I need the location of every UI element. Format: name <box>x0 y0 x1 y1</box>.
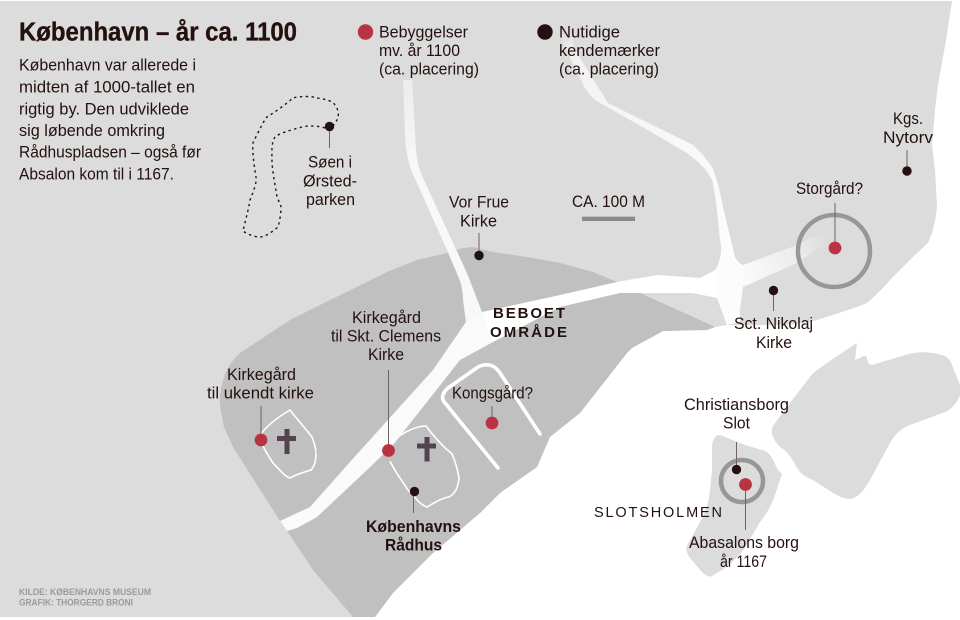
marker: Absalons borg: Abasalons borg <box>689 534 799 552</box>
legend: present-day landmarks: kendemærker <box>559 42 661 60</box>
marker: Storgård <box>796 180 870 287</box>
marker: Absalons borg <box>689 478 799 571</box>
title: København – år ca. 1100 <box>19 18 297 46</box>
land: inhabited area <box>220 247 715 617</box>
credits <box>19 587 151 608</box>
marker: unknown church cemetery: til ukendt kirke <box>207 384 314 402</box>
scale bar <box>572 192 645 221</box>
legend: settlements: Bebyggelser <box>379 24 469 42</box>
marker: Christiansborg Slot: Slot <box>723 414 750 432</box>
road: north-east <box>560 30 743 325</box>
marker: Skt. Clemens cemetery: til Skt. Clemens <box>331 328 441 346</box>
road: south-west <box>280 312 493 531</box>
text block: intro <box>19 56 201 183</box>
text block: intro: sig løbende omkring <box>19 121 165 140</box>
marker: unknown church cemetery: Kirkegård <box>227 366 296 384</box>
scale bar: CA. 100 M <box>572 192 645 211</box>
marker: Sct. Nikolaj Kirke: Kirke <box>756 334 792 352</box>
island: Amager <box>772 343 960 499</box>
marker: Søen i Ørstedparken: parken <box>306 191 355 209</box>
marker: Skt. Clemens cemetery: Kirke <box>368 346 404 364</box>
text block: intro: rigtig by. Den udviklede <box>19 99 189 118</box>
credits: GRAFIK: THORGERD BRONI <box>19 598 133 608</box>
marker: Københavns Rådhus: Rådhus <box>385 536 442 554</box>
label: Beboet område: OMRÅDE <box>490 324 567 341</box>
marker: Kgs. Nytorv <box>883 110 934 176</box>
marker: Søen i Ørstedparken: Søen i <box>308 154 352 172</box>
road: east <box>466 272 717 342</box>
marker: Søen i Ørstedparken: Ørsted- <box>303 172 357 190</box>
marker: Sct. Nikolaj Kirke: Sct. Nikolaj <box>734 315 813 333</box>
text block: intro: Rådhuspladsen – også før <box>19 143 201 162</box>
marker: Københavns Rådhus: Københavns <box>366 518 461 536</box>
marker: Storgård: Storgård? <box>796 180 863 198</box>
marker: Skt. Clemens cemetery: Kirkegård <box>352 309 421 327</box>
marker: Vor Frue Kirke: Vor Frue <box>449 194 509 212</box>
marker: Vor Frue Kirke: Kirke <box>460 212 497 230</box>
text block: intro: Absalon kom til i 1167. <box>19 164 174 183</box>
marker: Kgs. Nytorv: Nytorv <box>883 129 934 147</box>
credits: KILDE: KØBENHAVNS MUSEUM <box>19 587 151 597</box>
label: Beboet område <box>490 305 567 341</box>
marker: Søen i Ørstedparken <box>243 96 357 237</box>
island: Slotsholmen <box>686 435 782 576</box>
marker: Christiansborg Slot: Christiansborg <box>684 396 789 414</box>
marker: Vor Frue Kirke <box>449 194 509 260</box>
marker: Kgs. Nytorv: Kgs. <box>893 110 923 128</box>
marker: Kongsgård: Kongsgård? <box>452 384 533 402</box>
text block: intro: midten af 1000-tallet en <box>19 78 195 96</box>
legend: present-day landmarks <box>537 24 661 78</box>
marker: Københavns Rådhus <box>366 487 461 554</box>
marker: Sct. Nikolaj Kirke <box>734 286 813 352</box>
label: Beboet område: BEBOET <box>493 305 565 322</box>
marker: Kongsgård <box>443 365 540 468</box>
marker: unknown church cemetery <box>207 366 316 478</box>
legend: settlements: (ca. placering) <box>379 60 479 78</box>
road: to Storgård <box>743 230 826 287</box>
legend: settlements <box>358 24 479 78</box>
road: north-west <box>403 80 482 322</box>
marker: Christiansborg Slot <box>684 396 789 502</box>
legend: present-day landmarks: (ca. placering) <box>559 60 659 78</box>
text block: intro: København var allerede i <box>19 56 196 75</box>
label: Slotsholmen: SLOTSHOLMEN <box>594 505 722 521</box>
marker: Absalons borg: år 1167 <box>720 553 767 571</box>
marker: Skt. Clemens cemetery <box>331 309 459 507</box>
legend: present-day landmarks: Nutidige <box>559 24 620 42</box>
legend: settlements: mv. år 1100 <box>379 42 460 60</box>
